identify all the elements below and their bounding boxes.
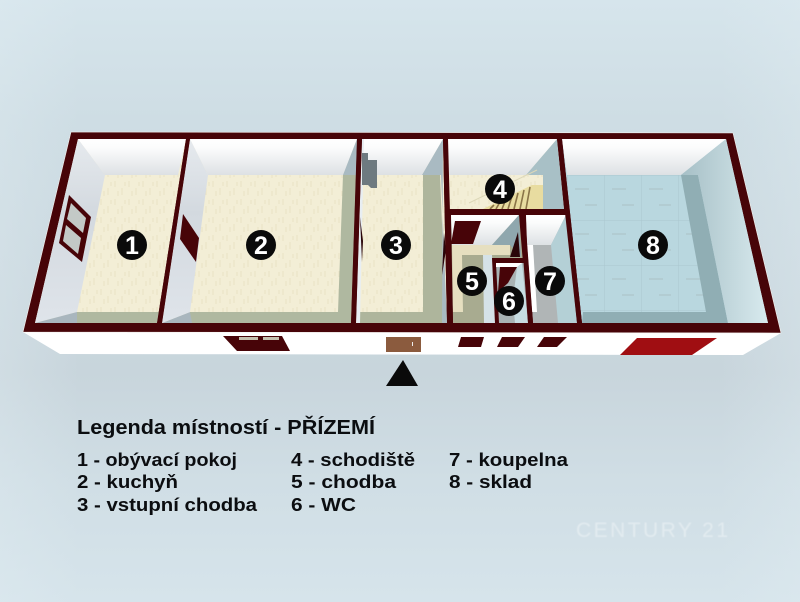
marker 1: 1 — [125, 232, 139, 260]
interior walls — [157, 139, 582, 323]
marker 3: 3 — [389, 232, 403, 260]
room 2: kitchen — [162, 139, 357, 323]
marker 5 — [457, 266, 487, 296]
entrance arrow — [386, 360, 418, 386]
room 5: corridor — [451, 215, 528, 323]
exterior window: kitchen — [223, 336, 290, 351]
building wall frame — [23, 132, 781, 333]
door right — [442, 233, 446, 275]
window — [59, 195, 91, 262]
marker 8 — [638, 230, 668, 260]
door right — [510, 232, 520, 257]
exterior window: small 3 — [537, 337, 567, 347]
legend list: 7 - koupelna — [449, 449, 569, 470]
building exterior wall — [23, 332, 781, 355]
marker 4: 4 — [493, 176, 507, 204]
legend list: 2 - kuchyň — [77, 471, 178, 492]
legend heading: Legenda místností - PŘÍZEMÍ — [77, 415, 375, 439]
legend list: 8 - sklad — [449, 471, 532, 492]
marker 5: 5 — [465, 268, 479, 296]
room 6: WC — [492, 258, 533, 323]
room 7: bathroom — [520, 215, 577, 323]
exterior red garage door — [620, 338, 717, 355]
door back — [451, 221, 481, 244]
door — [498, 267, 517, 292]
marker 4 — [485, 174, 515, 204]
marker 6: 6 — [502, 288, 516, 316]
exterior window: small 1 — [458, 337, 484, 347]
legend list: 4 - schodiště — [291, 449, 415, 470]
marker 7 — [535, 266, 565, 296]
marker 2: 2 — [254, 232, 268, 260]
door left — [360, 217, 363, 262]
door — [180, 214, 199, 262]
exterior entrance door — [386, 337, 421, 352]
watermark: CENTURY 21 — [576, 519, 728, 542]
exterior window: small 2 — [497, 337, 525, 347]
legend list: 6 - WC — [291, 494, 356, 515]
room 8: storage — [562, 139, 768, 323]
marker 7: 7 — [543, 268, 557, 296]
marker 2 — [246, 230, 276, 260]
room 3: entrance hall — [356, 139, 447, 323]
marker 8: 8 — [646, 232, 660, 260]
legend list — [77, 449, 569, 515]
room 4: staircase — [448, 139, 564, 210]
boiler — [362, 153, 377, 188]
legend list: 5 - chodba — [291, 471, 397, 492]
stairs — [469, 170, 543, 209]
legend list: 3 - vstupní chodba — [77, 494, 258, 515]
legend list: 1 - obývací pokoj — [77, 449, 237, 470]
divider wall — [449, 209, 565, 215]
marker 6 — [494, 286, 524, 316]
marker 1 — [117, 230, 147, 260]
room 1: living room — [35, 139, 186, 323]
marker 3 — [381, 230, 411, 260]
